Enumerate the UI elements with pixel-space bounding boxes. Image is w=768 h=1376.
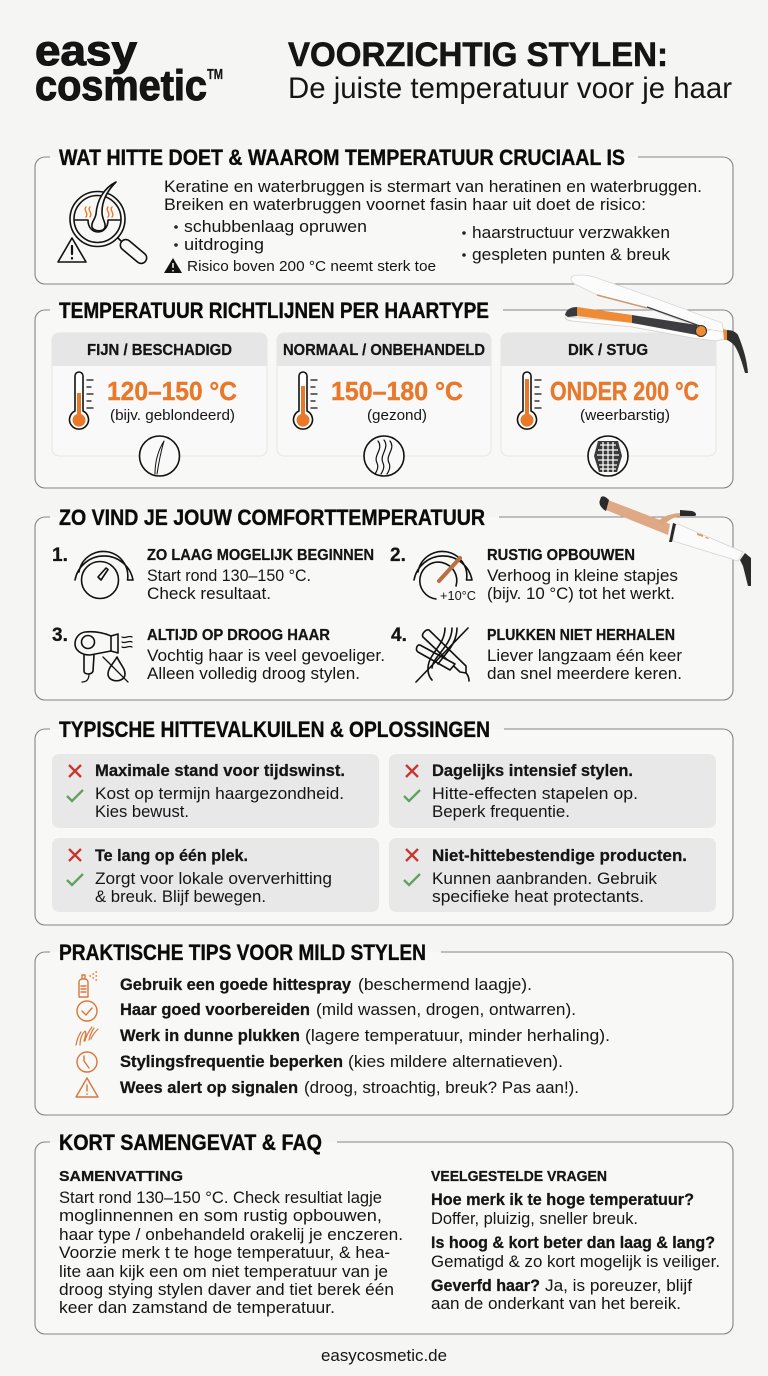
panel: hittevalkuilen: [35, 717, 733, 925]
text block: veelgestelde vragen: Gematigd & zo kort mogelijk is veiliger.: [431, 1253, 720, 1271]
card: dagelijks intensief: Hitte-effecten stapelen op.: [432, 785, 638, 803]
tip: frequentie: (kies mildere alternatieven).: [348, 1053, 563, 1071]
icon: normal hair: [364, 436, 404, 476]
card: dik / stug: (weerbarstig): [580, 407, 670, 424]
tip: frequentie: Stylingsfrequentie beperken: [120, 1053, 343, 1071]
card: niet-hittebestendige producten: [389, 838, 716, 912]
step 2: RUSTIG OPBOUWEN: [487, 547, 635, 564]
text block: samenvatting: moglinnennen en som rustig opbouwen,: [59, 1207, 382, 1225]
step 2: (bijv. 10 °C) tot het werkt.: [487, 585, 675, 603]
card: niet-hittebestendige producten: Niet-hittebestendige producten.: [432, 847, 687, 865]
card: normaal / onbehandeld: 150–180 °C: [331, 376, 463, 406]
text block: veelgestelde vragen: aan de onderkant van het bereik.: [431, 1295, 681, 1313]
text block: samenvatting: Start rond 130–150 °C. Check resultiat lagje: [59, 1189, 382, 1207]
text block: samenvatting: Voorzie merk t te hoge temperatuur, & hea-: [59, 1244, 390, 1262]
heading: samengevat: KORT SAMENGEVAT & FAQ: [59, 1130, 322, 1155]
card: niet-hittebestendige producten: specifieke heat protectants.: [432, 888, 644, 906]
tip: voorbereiden: Haar goed voorbereiden: [120, 1001, 310, 1019]
tip: hittespray: (beschermend laagje).: [358, 976, 532, 994]
card: normaal / onbehandeld: (gezond): [367, 407, 427, 424]
card: dagelijks intensief: Dagelijks intensief stylen.: [432, 762, 633, 780]
text block: intro: Breiken en waterbruggen voornet fasin haar uit doet de risico:: [164, 195, 646, 214]
list: left bullets: [174, 217, 367, 254]
text block: veelgestelde vragen: [431, 1168, 720, 1313]
icon: dial plus ten: +10°C: [440, 588, 476, 603]
logo: easy cosmetic: easy: [35, 27, 137, 75]
list: left bullets: uitdroging: [184, 235, 264, 254]
card: maximale stand: Kies bewust.: [95, 803, 189, 821]
icon: hair dryer and no water: [75, 632, 132, 682]
step 3: [52, 625, 385, 683]
card: te lang op een plek: & breuk. Blijf bewegen.: [95, 888, 266, 906]
text block: veelgestelde vragen: Ja, is poreuzer, blijf: [545, 1277, 692, 1295]
step 1: [52, 545, 374, 603]
heading: richtlijnen: TEMPERATUUR RICHTLIJNEN PER HAARTYPE: [59, 298, 489, 323]
step 4: dan snel meerdere keren.: [487, 665, 682, 683]
list: right bullets: haarstructuur verzwakken: [472, 223, 670, 242]
icon: fine hair: [140, 436, 180, 476]
card: maximale stand: [52, 754, 379, 828]
panel: comforttemperatuur: [35, 505, 733, 700]
list: right bullets: gespleten punten & breuk: [472, 245, 671, 264]
tip: hittespray: Gebruik een goede hittespray: [120, 976, 351, 994]
footer: easycosmetic.de: [321, 1347, 447, 1365]
text block: samenvatting: droog stying stylen daver and tiet berek één: [59, 1281, 394, 1299]
step 4: Liever langzaam één keer: [487, 647, 683, 665]
logo: easy cosmetic: cosmetic: [35, 62, 207, 110]
step 2: [390, 545, 678, 603]
callout: risico: Risico boven 200 °C neemt sterk toe: [187, 258, 436, 275]
card: fijn / beschadigd: [52, 333, 267, 476]
icon: dial low: [75, 551, 133, 598]
card: te lang op een plek: Te lang op één plek.: [95, 847, 248, 865]
card: fijn / beschadigd: FIJN / BESCHADIGD: [87, 342, 232, 359]
step 4: PLUKKEN NIET HERHALEN: [487, 627, 675, 644]
card: dagelijks intensief: [389, 754, 716, 828]
icon: thermometer high: [518, 372, 541, 429]
heading: hittevalkuilen: TYPISCHE HITTEVALKUILEN & OPLOSSINGEN: [59, 717, 490, 742]
title: VOORZICHTIG STYLEN:: [288, 36, 668, 74]
step 1: ZO LAAG MOGELIJK BEGINNEN: [147, 547, 374, 564]
step 1: Start rond 130–150 °C.: [147, 567, 311, 585]
image: curling iron: [599, 496, 751, 586]
text block: intro: [164, 177, 702, 214]
card: niet-hittebestendige producten: Kunnen aanbranden. Gebruik: [432, 870, 658, 888]
text block: samenvatting: haar type / onbehandeld orakelij je enczeren.: [59, 1226, 403, 1244]
text block: veelgestelde vragen: Hoe merk ik te hoge temperatuur?: [431, 1191, 694, 1209]
title: [288, 36, 732, 105]
step 3: Vochtig haar is veel gevoeliger.: [147, 647, 385, 665]
card: dagelijks intensief: Beperk frequentie.: [432, 803, 570, 821]
panel: samenvatting en faq: [35, 1130, 733, 1334]
tip: voorbereiden: [77, 1001, 576, 1021]
text block: intro: Keratine en waterbruggen is stermart van heratinen en waterbruggen.: [164, 177, 702, 196]
step 1: 1.: [52, 545, 68, 566]
text block: veelgestelde vragen: Is hoog & kort beter dan laag & lang?: [431, 1234, 715, 1252]
step 4: 4.: [391, 625, 407, 646]
card: normaal / onbehandeld: [277, 333, 491, 476]
icon: thermometer low: [70, 372, 93, 429]
heading: praktische tips: PRAKTISCHE TIPS VOOR MILD STYLEN: [59, 940, 426, 965]
panel: wat hitte doet: [35, 145, 733, 284]
card: fijn / beschadigd: (bijv. geblondeerd): [110, 407, 235, 424]
step 4: [391, 625, 683, 683]
tip: signalen: [76, 1078, 579, 1097]
step 3: 3.: [52, 625, 68, 646]
card: dik / stug: DIK / STUG: [568, 342, 648, 359]
tip: dunne plukken: Werk in dunne plukken: [120, 1027, 300, 1045]
icon: hair under magnifier: [58, 182, 149, 266]
tip: dunne plukken: (lagere temperatuur, minder herhaling).: [305, 1027, 610, 1045]
panel: temperatuur richtlijnen: [35, 298, 733, 488]
text block: veelgestelde vragen: Doffer, pluizig, sneller breuk.: [431, 1210, 638, 1228]
logo: easy cosmetic: [35, 27, 223, 110]
text block: samenvatting: SAMENVATTING: [59, 1168, 183, 1185]
icon: dial plus ten: [414, 551, 476, 603]
icon: coarse hair: [588, 436, 628, 476]
card: fijn / beschadigd: 120–150 °C: [107, 376, 237, 406]
step 3: Alleen volledig droog stylen.: [147, 665, 360, 683]
list: right bullets: [462, 223, 671, 264]
text block: samenvatting: [59, 1168, 403, 1317]
icon: repeated straightening crossed out: [416, 628, 469, 682]
icon: thermometer mid: [294, 372, 317, 429]
text block: veelgestelde vragen: VEELGESTELDE VRAGEN: [431, 1168, 607, 1185]
title: De juiste temperatuur voor je haar: [288, 72, 732, 105]
logo: easy cosmetic: TM: [207, 66, 223, 83]
image: flat iron: [565, 275, 748, 373]
tip: signalen: Wees alert op signalen: [120, 1079, 298, 1097]
step 2: 2.: [390, 545, 406, 566]
card: normaal / onbehandeld: NORMAAL / ONBEHANDELD: [283, 342, 485, 359]
tip: hittespray: [79, 972, 532, 997]
step 2: Verhoog in kleine stapjes: [487, 567, 678, 585]
card: dik / stug: [501, 333, 716, 476]
card: te lang op een plek: [52, 838, 379, 912]
text block: samenvatting: lite aan kijk een om niet temperatuur van je: [59, 1263, 388, 1281]
tip: dunne plukken: [76, 1027, 610, 1045]
card: te lang op een plek: Zorgt voor lokale oververhitting: [95, 870, 332, 888]
text block: veelgestelde vragen: Geverfd haar?: [431, 1277, 540, 1295]
list: left bullets: schubbenlaag opruwen: [184, 217, 367, 236]
tip: signalen: (droog, stroachtig, breuk? Pas aan!).: [304, 1079, 579, 1097]
tip: voorbereiden: (mild wassen, drogen, ontwarren).: [316, 1001, 576, 1019]
panel: praktische tips: [35, 940, 733, 1115]
step 1: Check resultaat.: [147, 585, 271, 603]
card: dik / stug: ONDER 200 °C: [550, 376, 699, 406]
step 3: ALTIJD OP DROOG HAAR: [147, 627, 330, 644]
heading: wat hitte doet: WAT HITTE DOET & WAAROM TEMPERATUUR CRUCIAAL IS: [59, 145, 625, 170]
heading: comforttemperatuur: ZO VIND JE JOUW COMFORTTEMPERATUUR: [59, 505, 485, 530]
text block: samenvatting: keer dan zamstand de temperatuur.: [59, 1299, 335, 1317]
tip: frequentie: [77, 1052, 563, 1072]
card: maximale stand: Maximale stand voor tijdswinst.: [95, 762, 345, 780]
card: maximale stand: Kost op termijn haargezondheid.: [95, 785, 344, 803]
